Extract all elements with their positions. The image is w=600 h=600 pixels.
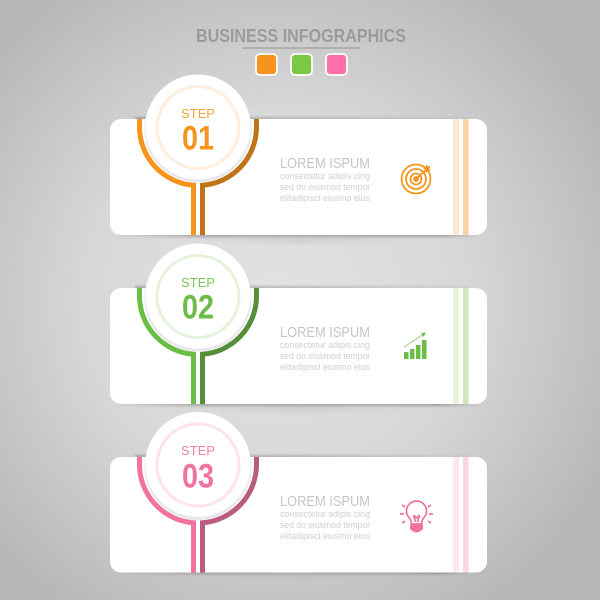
step badge (144, 412, 252, 520)
card shadow (118, 455, 478, 580)
icon: target (402, 164, 431, 194)
step badge (144, 74, 252, 182)
card shadow (118, 117, 478, 243)
text block: consectetur adipis cing (280, 171, 370, 181)
text block: LOREM ISPUM (280, 324, 370, 341)
text block: sed do eiusmod tempor (280, 351, 370, 361)
icon: growth chart (404, 332, 426, 359)
card (110, 119, 487, 235)
step label: STEP (181, 443, 215, 458)
text block: consectetur adipis cing (280, 509, 370, 519)
step number: 01 (182, 120, 214, 158)
connector (140, 457, 256, 572)
card shadow (118, 286, 478, 412)
side stripes (453, 457, 468, 572)
text block (280, 155, 370, 203)
card (110, 288, 487, 404)
text block (280, 493, 370, 541)
text block: sed do eiusmod tempor (280, 182, 370, 192)
text block: consectetur adipis cing (280, 340, 370, 350)
panel: step 01 (110, 74, 487, 243)
text block (280, 324, 370, 372)
title: BUSINESS INFOGRAPHICS (196, 26, 406, 46)
text block: elitadipisci eiusmo eius (280, 531, 370, 541)
colour legend squares (256, 54, 347, 75)
connector (140, 288, 256, 404)
panel: step 03 (110, 412, 487, 580)
text block: LOREM ISPUM (280, 493, 370, 510)
panel: step 02 (110, 244, 487, 412)
step number: 03 (182, 458, 214, 496)
step number: 02 (182, 288, 214, 326)
step label: STEP (181, 275, 215, 290)
connector (140, 119, 256, 235)
text block: elitadipisci eiusmo eius (280, 362, 370, 372)
text block: sed do eiusmod tempor (280, 520, 370, 530)
text block: LOREM ISPUM (280, 155, 370, 172)
side stripes (453, 119, 468, 235)
card (110, 457, 487, 572)
side stripes (453, 288, 468, 404)
step badge (144, 244, 252, 352)
icon: light bulb (400, 501, 433, 532)
text block: elitadipisci eiusmo eius (280, 193, 370, 203)
step label: STEP (181, 106, 215, 121)
